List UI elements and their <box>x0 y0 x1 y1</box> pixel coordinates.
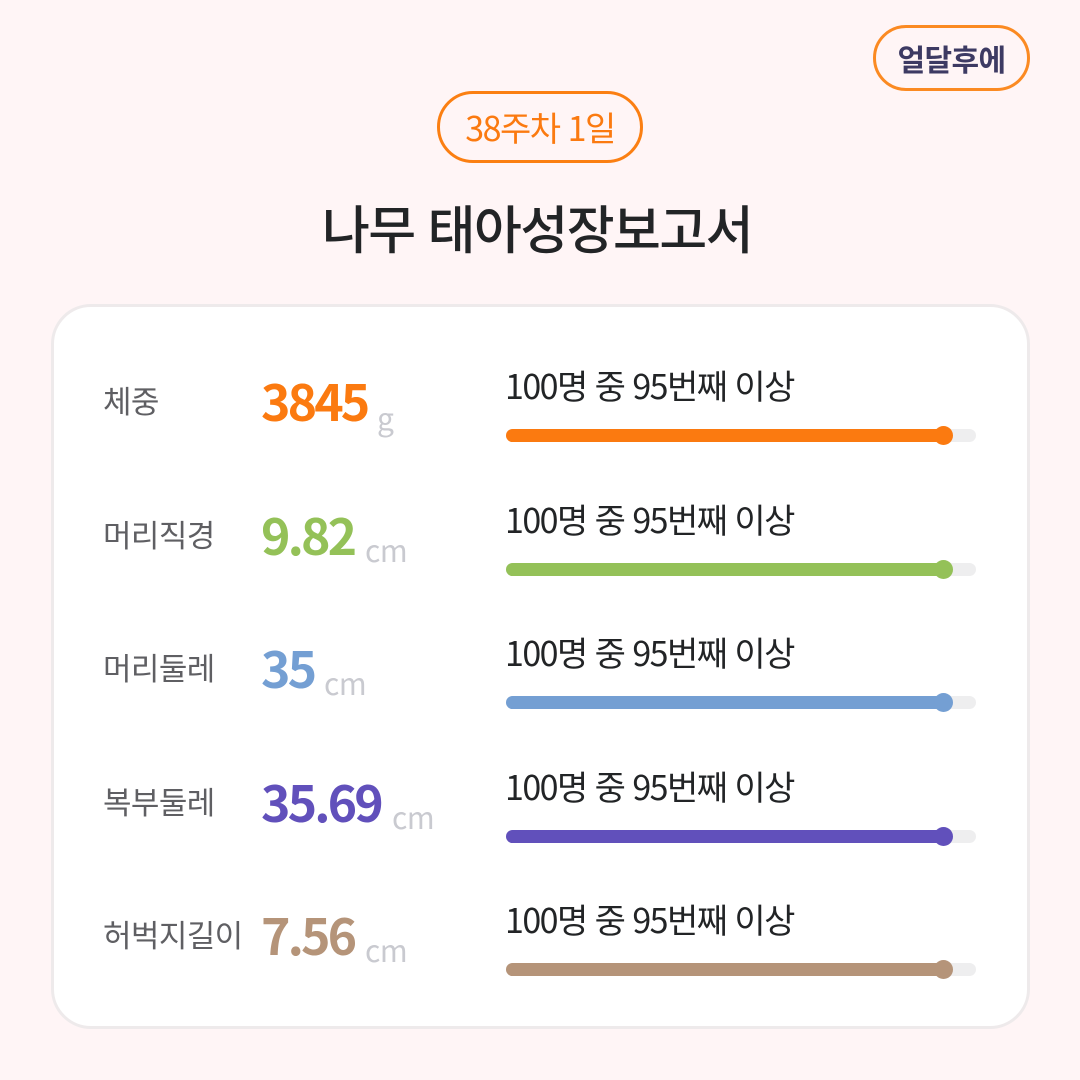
progress bar: weight <box>506 429 976 442</box>
week badge: 38주차 1일 <box>465 102 615 151</box>
value: abdominal circumference: 35.69 <box>261 765 381 837</box>
percentile text: head diameter: 100명 중 95번째 이상 <box>505 494 794 543</box>
row: head circumference <box>103 627 976 712</box>
brand badge <box>873 25 1030 91</box>
value: femur length: 7.56 <box>261 898 354 970</box>
progress bar: femur length <box>506 963 976 976</box>
unit: cm: cm <box>392 794 434 838</box>
label: head circumference: 머리둘레 <box>103 644 215 689</box>
value: head diameter: 9.82 <box>261 498 354 570</box>
panel: growth report <box>51 304 1030 1029</box>
percentile text: femur length: 100명 중 95번째 이상 <box>505 894 794 943</box>
unit: grams: g <box>377 395 394 439</box>
label: abdominal circumference: 복부둘레 <box>103 778 215 823</box>
brand badge: 얼달후에 <box>898 36 1006 80</box>
row: abdominal circumference <box>103 761 976 846</box>
unit: cm: cm <box>324 660 366 704</box>
row: head diameter <box>103 494 976 579</box>
value: head circumference: 35 <box>261 631 314 703</box>
progress bar: abdominal circumference <box>506 830 976 843</box>
label: femur length: 허벅지길이 <box>103 911 243 956</box>
unit: cm: cm <box>365 527 407 571</box>
label: head diameter: 머리직경 <box>103 511 215 556</box>
progress bar: head diameter <box>506 563 976 576</box>
progress bar: head circumference <box>506 696 976 709</box>
row: femur length <box>103 894 976 979</box>
label: weight: 체중 <box>103 377 159 422</box>
row: weight <box>103 360 976 445</box>
percentile text: head circumference: 100명 중 95번째 이상 <box>505 627 794 676</box>
percentile text: weight: 100명 중 95번째 이상 <box>505 360 794 409</box>
title: 나무 태아성장보고서 <box>322 189 752 264</box>
unit: cm: cm <box>365 927 407 971</box>
percentile text: abdominal circumference: 100명 중 95번째 이상 <box>505 761 794 810</box>
value: weight: 3845 <box>261 364 367 436</box>
week badge <box>437 91 643 163</box>
